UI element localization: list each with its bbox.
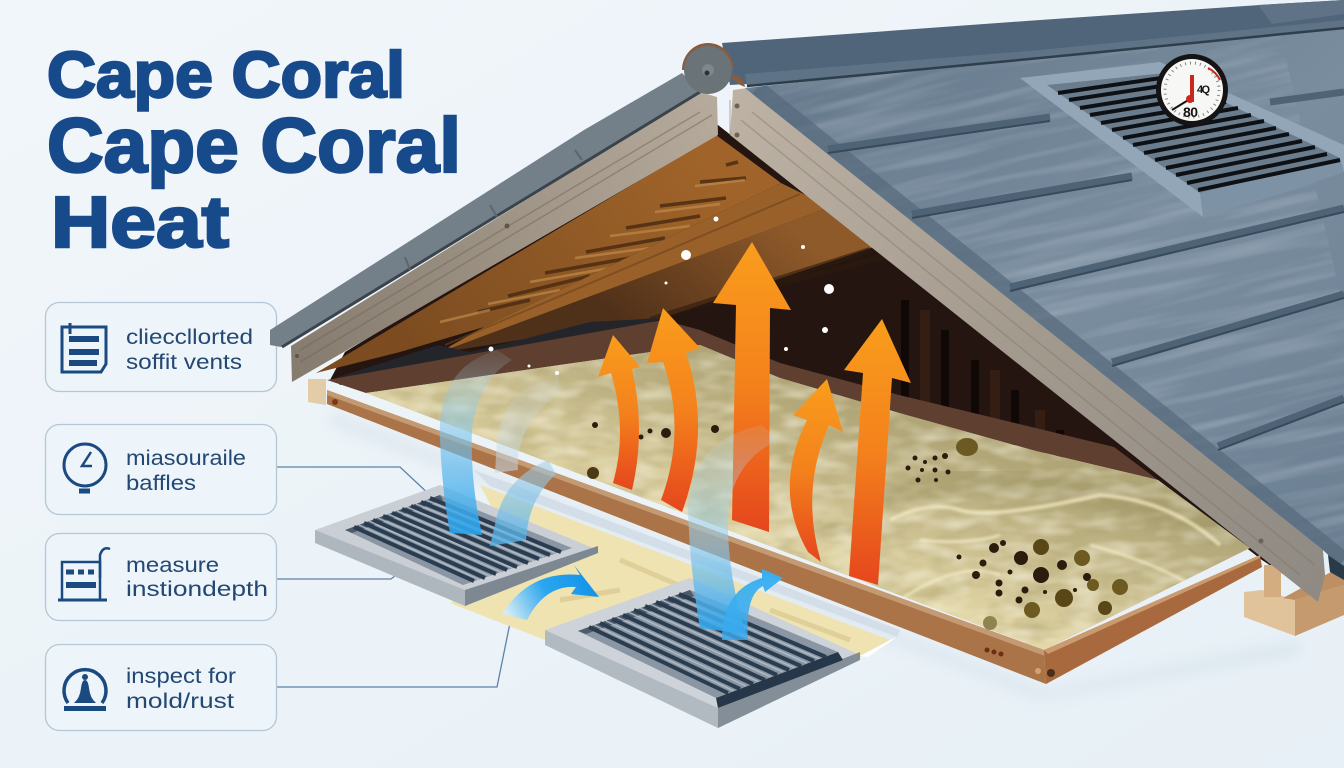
- ridge cap: [722, 0, 1344, 86]
- ridge end disc: [682, 43, 745, 94]
- airflow right: [688, 425, 778, 634]
- title: [47, 38, 461, 263]
- text: insulation depth: measure: [126, 554, 219, 577]
- back rail: [327, 320, 1158, 480]
- panel: insulation depth: [46, 534, 276, 620]
- arrow: tall right: [844, 319, 911, 585]
- text: insulation depth: [126, 554, 268, 601]
- lower insulation strip: [474, 470, 900, 637]
- corner support post: [1244, 565, 1344, 636]
- title: Heat: [51, 183, 229, 263]
- text: baffles: miasouraile: [126, 447, 246, 470]
- roof ribs: [828, 92, 1344, 446]
- icon: inspection dome: [64, 670, 106, 711]
- rising particles: [488, 216, 834, 375]
- text: insulation depth: instiondepth: [126, 578, 268, 601]
- arrow: second: [647, 308, 700, 512]
- main rafter beam: [438, 183, 830, 353]
- text: mold and rust: inspect for: [126, 665, 236, 688]
- title: Cape Coral: [47, 38, 405, 111]
- wooden floor rail: [308, 379, 1262, 684]
- rafters under the roof: [316, 135, 890, 385]
- left gable board: [291, 92, 718, 382]
- attic back wall: [330, 125, 1322, 600]
- panel: mold and rust: [46, 644, 276, 730]
- right gable board: [730, 88, 1325, 602]
- text: soffit vents: [126, 326, 253, 374]
- ground shadow: [330, 410, 1300, 700]
- arrow: floor airflow: [502, 565, 599, 620]
- insulation floor: [360, 340, 1260, 655]
- heat arrows: [598, 242, 911, 585]
- intake vent left: [315, 485, 598, 606]
- arrow: low right: [790, 379, 843, 562]
- intake vent right: [545, 578, 860, 728]
- insulation folds: [884, 471, 1232, 598]
- roof vent: [1020, 62, 1344, 217]
- rafter chevrons: [478, 162, 746, 312]
- text: soffit vents: soffit vents: [126, 351, 242, 374]
- right roof surface: [745, 27, 1344, 580]
- panel: soffit vents: [46, 302, 276, 392]
- callout leader lines: [276, 467, 510, 687]
- roof cutaway illustration: [270, 0, 1344, 759]
- temperature gauge: [1156, 54, 1228, 126]
- arrow: far left: [598, 335, 640, 490]
- icon: vent note: [62, 323, 106, 372]
- arrow: right vent outlet: [722, 569, 783, 640]
- text: baffles: baffles: [126, 472, 196, 495]
- arrow: centre: [713, 242, 791, 532]
- airflow left: [440, 350, 560, 546]
- dark gap: [335, 318, 663, 385]
- panel: baffles: [46, 424, 276, 514]
- mold spots: [587, 422, 1128, 630]
- temperature gauge: 80: [1183, 104, 1198, 120]
- text: mold and rust: [126, 665, 236, 713]
- text: baffles: [126, 447, 246, 495]
- temperature gauge: 4Q: [1197, 84, 1210, 96]
- icon: depth meter: [58, 548, 110, 600]
- title: Cape Coral: [47, 103, 461, 189]
- text: mold and rust: mold/rust: [126, 690, 234, 713]
- icon: gauge: [64, 444, 106, 491]
- left roof edge: [270, 73, 700, 347]
- text: soffit vents: clieccllorted: [126, 326, 253, 349]
